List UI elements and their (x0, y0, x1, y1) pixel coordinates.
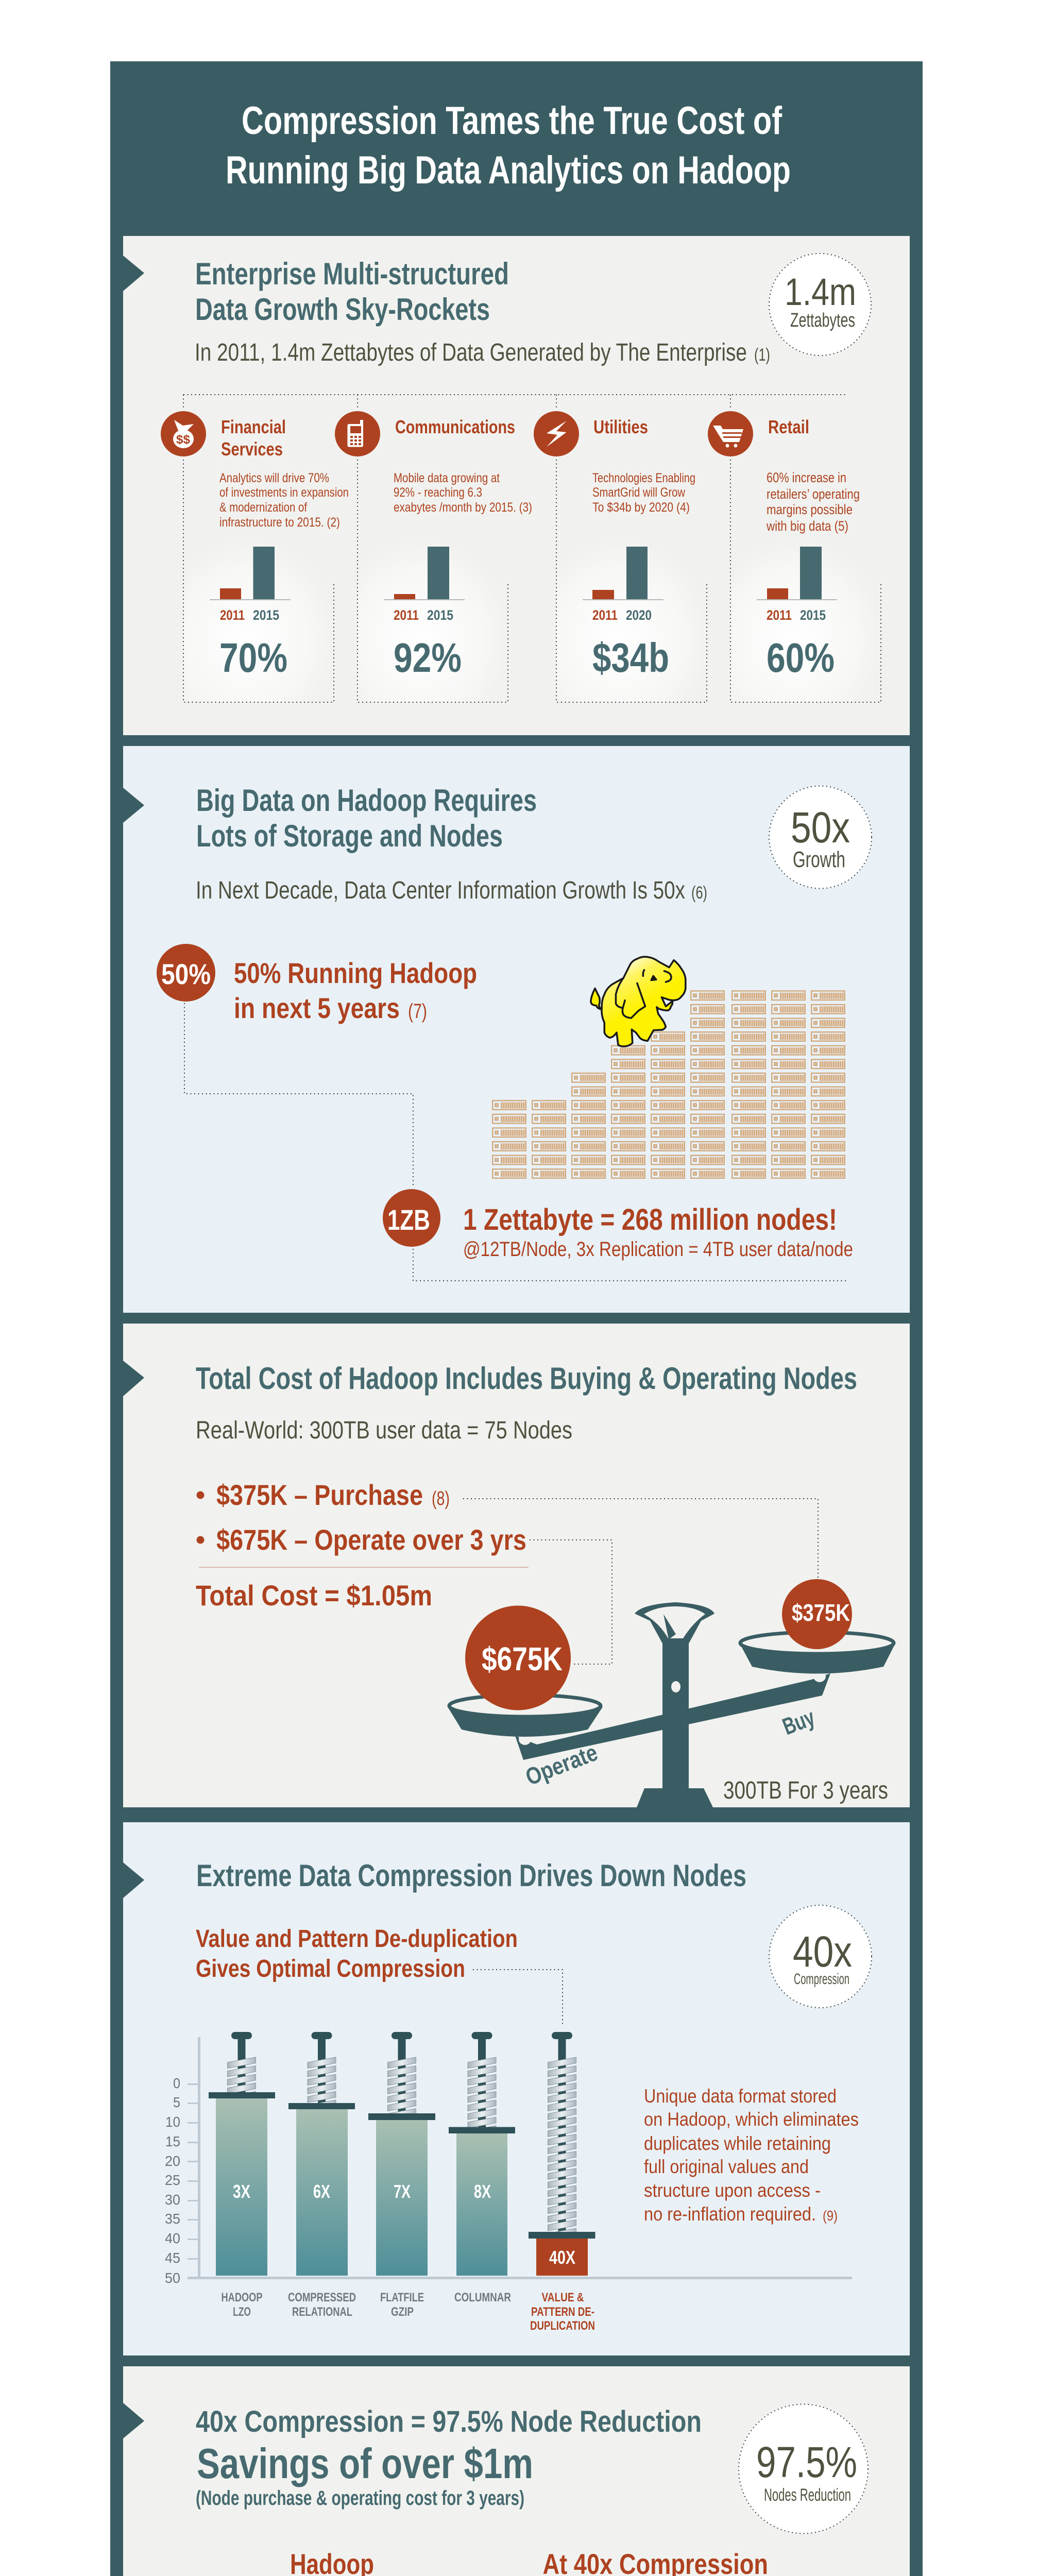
explanation text: Unique data format stored (644, 2086, 837, 2107)
weight: $675K operate (465, 1605, 571, 1710)
icon: phone (335, 411, 380, 456)
badge: 1ZB (383, 1189, 440, 1247)
subheading (196, 1925, 518, 1982)
statement: zettabyte nodes (463, 1203, 853, 1261)
callout: 1.4m zettabytes: 1.4m (785, 270, 856, 313)
category title: Financial (221, 416, 286, 437)
callout: 40x compression (769, 1905, 872, 2008)
statement: zettabyte nodes: @12TB/Node, 3x Replication = 4TB user data/node (463, 1238, 853, 1261)
cost list: (8) (432, 1488, 450, 1510)
panel: extreme compression (123, 1822, 910, 2355)
subtitle: Real-World: 300TB user data = 75 Nodes (196, 1417, 572, 1444)
heading: Enterprise Multi-structured (195, 257, 509, 291)
bar chart: 2015 (427, 607, 453, 623)
callout: 1.4m zettabytes (769, 253, 871, 355)
arrow marker (123, 788, 144, 823)
description (592, 471, 695, 515)
description: 92% - reaching 6.3 (394, 485, 482, 500)
panel: enterprise data growth (123, 236, 910, 735)
bar: hadoop LZO 3X: 3X (233, 2181, 250, 2202)
explanation text: structure upon access - (644, 2180, 821, 2201)
category title: Communications (395, 416, 515, 437)
explanation text (644, 2086, 859, 2225)
bar: columnar 8X: 8X (474, 2181, 491, 2202)
title: Running Big Data Analytics on Hadoop (226, 148, 791, 192)
arrow marker (123, 256, 144, 291)
balance scale: Buy (779, 1703, 819, 1740)
axis scale labels: 50 (165, 2270, 180, 2286)
description: SmartGrid will Grow (592, 485, 686, 500)
column: retail (708, 411, 860, 681)
statement: 50% running hadoop: in next 5 years (234, 992, 400, 1024)
bar chart: 2015 (253, 607, 279, 623)
bar: columnar 8X (449, 2032, 515, 2304)
bar: flatfile gzip 7X: 7X (394, 2181, 411, 2202)
heading: Big Data on Hadoop Requires (196, 783, 537, 818)
description (394, 471, 532, 515)
heading: (Node purchase & operating cost for 3 years) (196, 2487, 524, 2510)
bar: compressed relational 6X (288, 2032, 356, 2319)
icon: lightning bolt (534, 411, 579, 456)
cost list: $675K – Operate over 3 yrs (216, 1523, 526, 1556)
explanation text: duplicates while retaining (644, 2133, 831, 2154)
bar: compressed relational 6X: 6X (313, 2181, 330, 2202)
column: communications (335, 411, 532, 681)
description: Technologies Enabling (592, 471, 695, 485)
description: & modernization of (219, 500, 307, 515)
description (766, 470, 860, 534)
subtitle: (6) (691, 883, 707, 903)
category title: Services (221, 438, 283, 460)
callout: 1.4m zettabytes: Zettabytes (790, 310, 855, 331)
category title: Retail (768, 416, 809, 437)
column: financial services (161, 411, 349, 681)
dotted connectors (463, 1499, 818, 1664)
description: Mobile data growing at (394, 471, 500, 485)
cost list (196, 1479, 529, 1612)
axes (188, 2037, 852, 2279)
badge: 1ZB: 1ZB (387, 1204, 430, 1236)
note: duration: 300TB For 3 years (723, 1777, 888, 1804)
title (226, 99, 791, 192)
callout: 50x growth (769, 786, 872, 888)
axis scale labels: 35 (165, 2211, 180, 2227)
bar chart: 2015 (800, 607, 826, 623)
axis scale labels (165, 2075, 180, 2286)
badge: 50% (157, 944, 215, 1002)
icon: hadoop elephant on servers (591, 957, 686, 1046)
bar chart: 2011 (767, 607, 792, 623)
dark background panel (110, 61, 923, 2576)
bar: flatfile gzip 7X (368, 2032, 435, 2319)
axis scale labels: 20 (165, 2153, 180, 2169)
dotted connectors (184, 1003, 846, 1281)
bar chart (210, 547, 291, 623)
description: To $34b by 2020 (4) (592, 500, 690, 515)
icon: shopping cart (708, 411, 753, 456)
title: Compression Tames the True Cost of (242, 99, 782, 143)
bar: value and pattern de-duplication 40X: PATTERN DE- (531, 2305, 594, 2319)
glow behind stat boxes (183, 536, 881, 702)
axis scale labels: 10 (165, 2114, 180, 2130)
bar chart (583, 547, 663, 623)
explanation text: full original values and (644, 2156, 809, 2177)
bar: columnar 8X: COLUMNAR (454, 2291, 511, 2304)
subheading: Gives Optimal Compression (196, 1955, 465, 1982)
bar chart: 2011 (592, 607, 618, 623)
weight: $375K buy: $375K (792, 1599, 850, 1626)
heading (196, 2405, 702, 2510)
stat value: $34b (592, 635, 669, 681)
callout: 50x growth: Growth (793, 847, 845, 872)
arrow marker (123, 2403, 144, 2438)
badge: 50%: 50% (161, 958, 211, 990)
panel: total cost (123, 1324, 910, 1807)
category title (221, 416, 286, 460)
callout: 50x growth: 50x (791, 803, 850, 852)
arrow marker (123, 1361, 144, 1396)
balance scale (448, 1602, 895, 1807)
bar: value and pattern de-duplication 40X: DUPLICATION (530, 2319, 595, 2333)
statement: 50% running hadoop: 50% Running Hadoop (234, 957, 477, 989)
dotted frames connecting the four industries (183, 395, 881, 702)
bar: hadoop LZO 3X: LZO (233, 2305, 251, 2319)
description: 60% increase in (767, 470, 846, 485)
stat value: 70% (219, 635, 287, 681)
stat value: 60% (767, 635, 835, 681)
axis scale labels: 40 (165, 2230, 180, 2246)
explanation text: (9) (823, 2208, 838, 2224)
bar chart (757, 547, 837, 623)
axis scale labels: 30 (165, 2192, 180, 2208)
heading: Extreme Data Compression Drives Down Nodes (196, 1858, 746, 1893)
bar: flatfile gzip 7X: GZIP (391, 2305, 414, 2319)
arrow marker (123, 1862, 144, 1898)
heading: Data Growth Sky-Rockets (195, 292, 490, 327)
description: retailers’ operating (767, 486, 860, 502)
cost list: Total Cost = $1.05m (196, 1579, 432, 1612)
bar: compressed relational 6X: COMPRESSED (288, 2291, 356, 2304)
heading: Savings of over $1m (197, 2439, 533, 2487)
description: margins possible (767, 502, 853, 517)
description: exabytes /month by 2015. (3) (394, 500, 532, 515)
heading (195, 257, 509, 327)
bar chart: 2020 (626, 607, 652, 623)
axis scale labels: 25 (165, 2172, 180, 2188)
axis scale labels: 45 (165, 2250, 180, 2266)
stat value: 92% (394, 635, 462, 681)
statement: 50% running hadoop (234, 957, 477, 1024)
axis scale labels: 0 (173, 2075, 180, 2091)
statement: zettabyte nodes: 1 Zettabyte = 268 million nodes! (463, 1203, 837, 1236)
callout: 97.5% reduction: 97.5% (756, 2438, 857, 2486)
heading: 40x Compression = 97.5% Node Reduction (196, 2405, 702, 2438)
bar: compressed relational 6X: RELATIONAL (292, 2305, 352, 2319)
bar: value and pattern de-duplication 40X: VALUE & (542, 2291, 584, 2304)
bar chart: 2011 (220, 607, 245, 623)
description: of investments in expansion (219, 485, 349, 500)
bar: hadoop LZO 3X (209, 2032, 275, 2319)
dotted connector (473, 1970, 563, 2026)
statement: 50% running hadoop: (7) (408, 1000, 427, 1023)
icon: money bag: $$ (176, 433, 191, 447)
cost list: $375K – Purchase (216, 1479, 423, 1511)
subheading: Value and Pattern De-duplication (196, 1925, 518, 1953)
explanation text: on Hadoop, which eliminates (644, 2109, 859, 2130)
bar: value and pattern de-duplication 40X (529, 2032, 595, 2333)
axis scale labels: 5 (173, 2094, 180, 2110)
server stack chart (492, 991, 845, 1178)
callout: 40x compression: 40x (793, 1927, 852, 1976)
heading (196, 783, 537, 853)
bar: flatfile gzip 7X: FLATFILE (380, 2291, 424, 2304)
column: utilities (534, 411, 695, 681)
subtitle: (1) (754, 345, 770, 365)
bar: value and pattern de-duplication 40X: 40X (549, 2247, 575, 2268)
description (219, 471, 349, 530)
description: with big data (5) (766, 518, 848, 534)
heading: Lots of Storage and Nodes (196, 819, 503, 853)
callout: 97.5% reduction: Nodes Reduction (764, 2485, 851, 2505)
description: Analytics will drive 70% (219, 471, 329, 485)
weight: $375K buy (782, 1579, 852, 1649)
subtitle: In 2011, 1.4m Zettabytes of Data Generated by The Enterprise (195, 339, 747, 366)
icon: money bag (161, 411, 206, 456)
panel: node reduction (123, 2366, 910, 2576)
bar chart (384, 547, 465, 623)
subtitle: In Next Decade, Data Center Information Growth Is 50x (196, 877, 685, 904)
callout: 40x compression: Compression (794, 1971, 849, 1988)
compression spring chart (165, 2032, 852, 2333)
bar: hadoop LZO 3X: HADOOP (222, 2291, 263, 2304)
explanation text: no re-inflation required. (644, 2204, 816, 2225)
callout: 97.5% reduction (739, 2404, 868, 2534)
description: infrastructure to 2015. (2) (219, 515, 340, 530)
heading: Total Cost of Hadoop Includes Buying & Operating Nodes (196, 1361, 857, 1396)
weight: $675K operate: $675K (482, 1640, 563, 1677)
balance scale: Operate (522, 1739, 601, 1790)
panel: storage and nodes (123, 746, 910, 1313)
category title: Utilities (593, 416, 648, 437)
axis scale labels: 15 (165, 2133, 180, 2149)
bar chart: 2011 (394, 607, 419, 623)
